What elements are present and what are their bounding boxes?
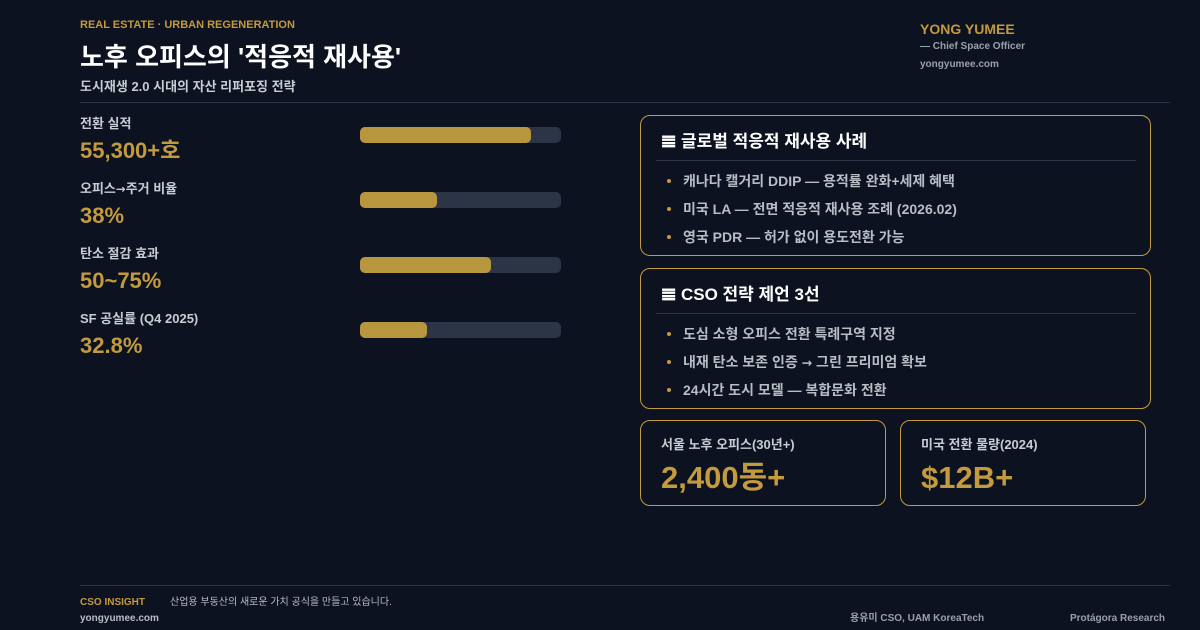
panel: global cases: 캐나다 캘거리 DDIP — 용적률 완화+세제 혜택 [683,173,955,189]
bar: 탄소 [360,257,561,273]
footer [80,596,1165,624]
stat: SF: 32.8% [80,333,142,358]
bar: SF [360,322,561,338]
card: US [900,420,1146,506]
card: US: $12B+ [921,460,1013,495]
panel: global cases: 미국 LA — 전면 적응적 재사용 조례 (2026.02) [683,201,957,217]
stat: 전환 실적: 전환 실적 [80,116,131,131]
stat: 전환 실적 [80,116,180,163]
author block: yongyumee.com [920,59,999,70]
bar: 비율 [360,192,561,208]
panel heading: 𝌆 글로벌 적응적 재사용 사례 [661,132,867,151]
card: Seoul: 서울 노후 오피스(30년+) [661,437,795,452]
panel heading: 𝌆 CSO 전략 제언 3선 [661,285,820,304]
stat: 비율: 38% [80,203,124,228]
title: 노후 오피스의 '적응적 재사용' [80,42,401,72]
footer: yongyumee.com [80,613,159,624]
panel: global cases: 영국 PDR — 허가 없이 용도전환 가능 [683,229,904,245]
panel: global cases [640,115,1151,256]
stat: 탄소: 탄소 절감 효과 [80,246,159,261]
stat: 전환 실적: 55,300+호 [80,138,180,163]
footer: Protágora Research [1070,613,1165,624]
panel: CSO proposals: 24시간 도시 모델 — 복합문화 전환 [683,382,887,398]
panel: CSO proposals: 도심 소형 오피스 전환 특례구역 지정 [683,326,896,342]
footer: 용유미 CSO, UAM KoreaTech [850,613,984,624]
panel: CSO proposals [640,268,1151,409]
author block [920,21,1025,70]
bar: 전환 실적 [360,127,561,143]
subtitle: 도시재생 2.0 시대의 자산 리퍼포징 전략 [80,79,296,94]
stat: 비율 [80,181,177,228]
panel: CSO proposals: 내재 탄소 보존 인증 → 그린 프리미엄 확보 [683,354,927,370]
author block: YONG YUMEE [920,21,1015,37]
stat: 탄소: 50~75% [80,268,161,293]
footer: 산업용 부동산의 새로운 가치 공식을 만들고 있습니다. [170,597,392,608]
footer: CSO INSIGHT [80,597,145,608]
stat: SF: SF 공실률 (Q4 2025) [80,311,198,326]
stat: 비율: 오피스→주거 비율 [80,181,177,196]
card: Seoul: 2,400동+ [661,460,785,495]
stat: 탄소 [80,246,161,293]
author block: — Chief Space Officer [920,41,1025,52]
card: US: 미국 전환 물량(2024) [921,437,1038,452]
card: Seoul [640,420,886,506]
kicker: REAL ESTATE · URBAN REGENERATION [80,19,295,31]
stat: SF [80,311,198,358]
